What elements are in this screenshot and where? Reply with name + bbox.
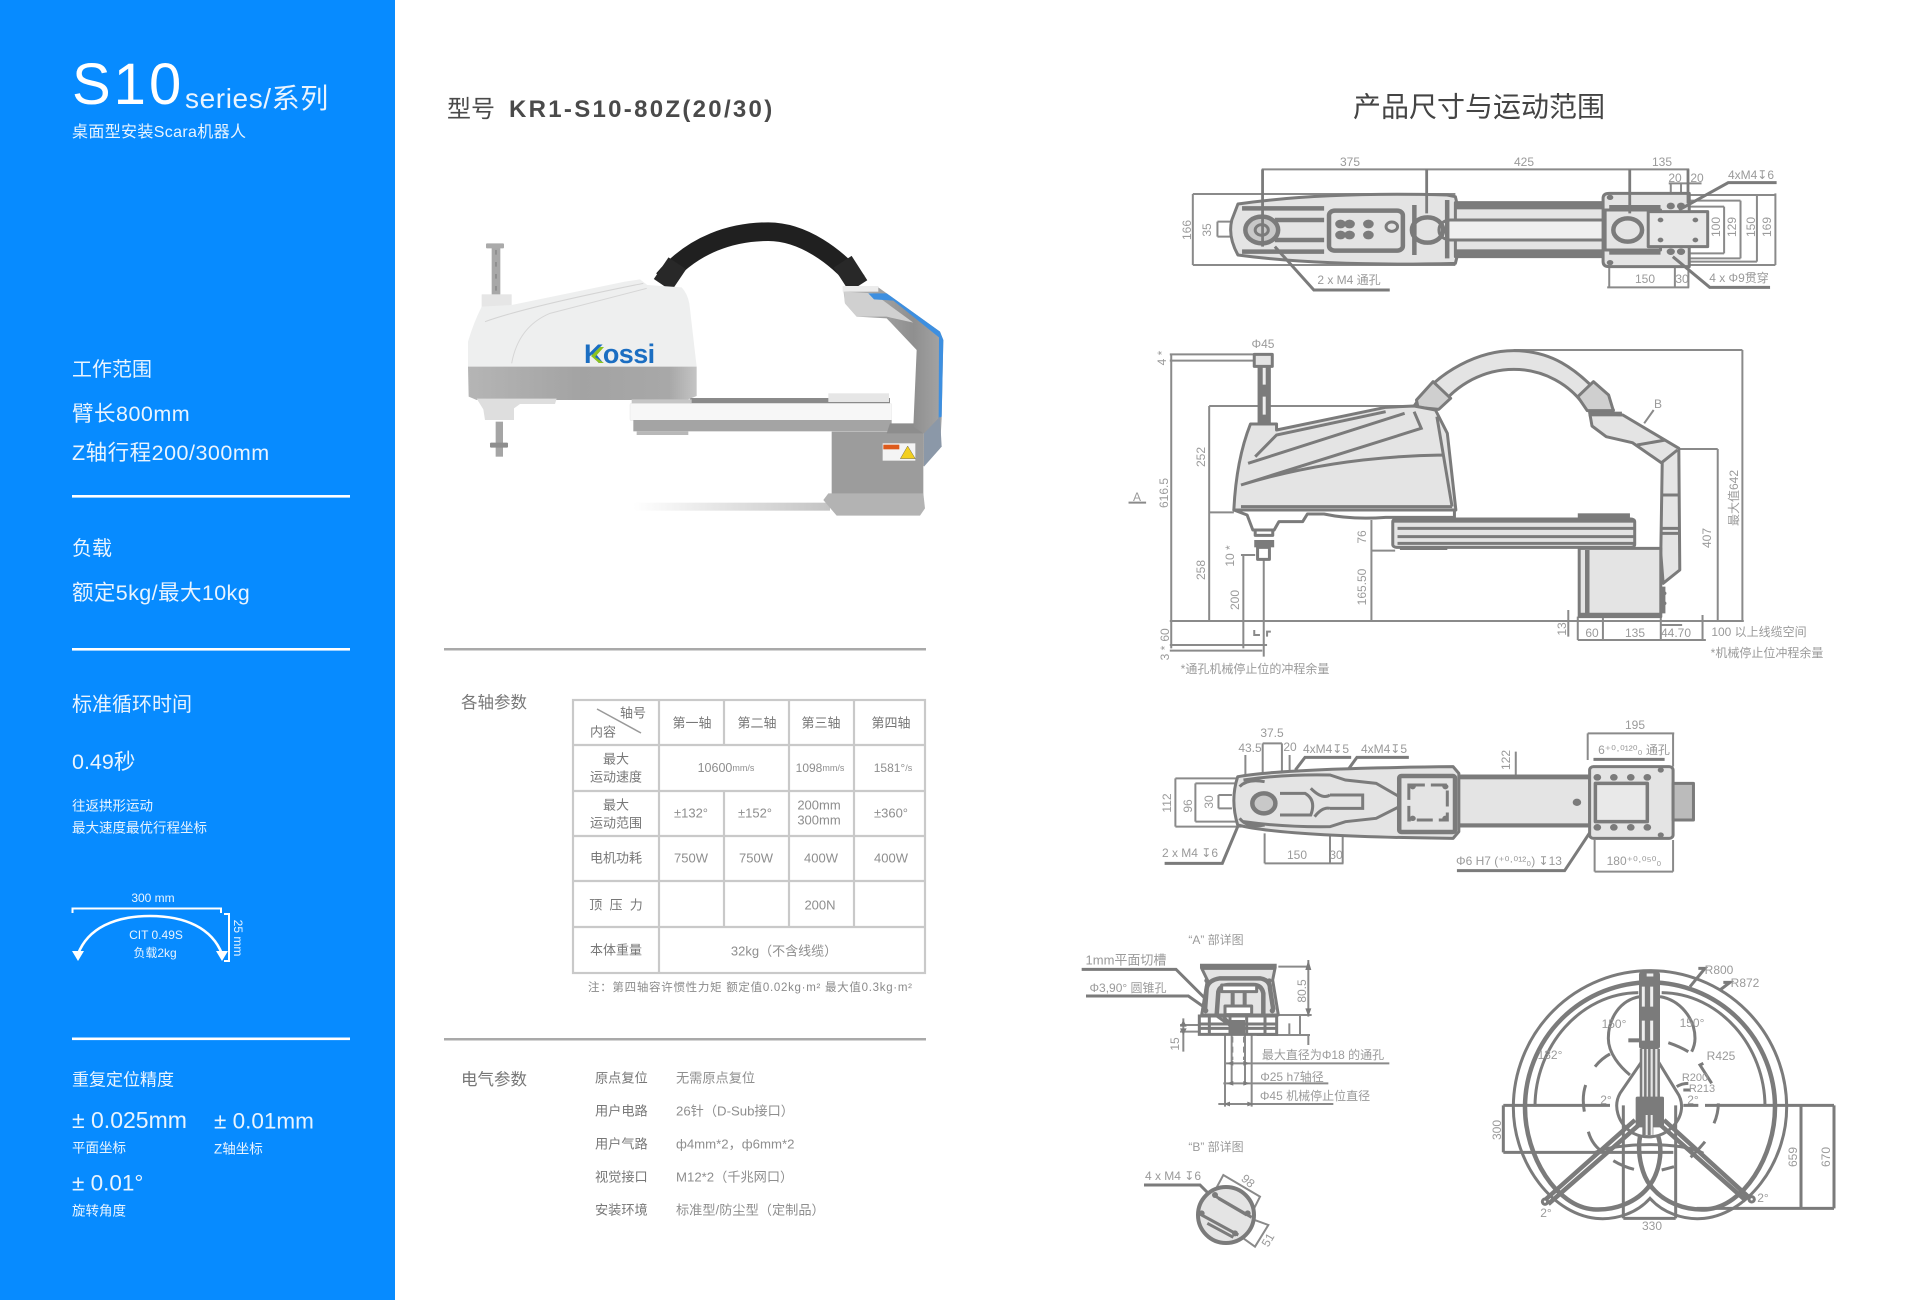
drawing: motion range (1490, 963, 1834, 1233)
drawing: side view: Φ45 (1252, 337, 1275, 351)
list: electrical parameters: 无需原点复位 (676, 1070, 755, 1086)
title: S10 series (72, 52, 329, 117)
table: axis parameters: 300mm (797, 812, 841, 828)
table: axis parameters: 内容 (590, 724, 616, 740)
drawing: motion range: 300 (1490, 1120, 1504, 1140)
table: axis parameters: 最大 (603, 798, 629, 812)
drawing: side view: 最大值642 (1726, 470, 1741, 526)
drawing: top view: 375 (1340, 155, 1360, 169)
drawing: side view: 13 (1555, 622, 1569, 636)
chart: arch motion diagram: CIT 0.49S (129, 928, 183, 942)
heading: dimensions and motion range: 产品尺寸与运动范围 (1353, 92, 1605, 122)
table: axis parameters: 200N (804, 898, 836, 912)
table: axis parameters: 轴号 (620, 706, 646, 720)
title: S10 series: S10 (72, 52, 184, 117)
drawing: side view (1129, 337, 1823, 676)
list: electrical parameters: M12*2（千兆网口） (676, 1170, 793, 1184)
drawing: top view: 169 (1760, 217, 1774, 237)
block: cycle time: 最大速度最优行程坐标 (72, 820, 207, 836)
drawing: side view: A (1133, 490, 1141, 504)
drawing: underside view: 37.5 (1260, 726, 1284, 740)
block: cycle time: 0.49秒 (72, 750, 135, 774)
drawing: motion range: 150° (1602, 1017, 1627, 1031)
drawing: top view: 166 (1180, 220, 1194, 240)
block: working range: Z轴行程200/300mm (72, 441, 270, 465)
heading: model number: KR1-S10-80Z(20/30) (509, 96, 774, 123)
drawing: underside view: 30 (1202, 795, 1216, 809)
list: electrical parameters (595, 1070, 825, 1218)
block: working range: 臂长800mm (72, 402, 190, 426)
drawing: motion range: 132° (1538, 1048, 1563, 1062)
drawing: side view: 616.5 (1157, 478, 1171, 508)
table: axis parameters: 1581°/s (874, 761, 913, 775)
drawing: detail A: 1mm平面切槽 (1086, 952, 1166, 968)
drawing: side view: 76 (1355, 530, 1369, 544)
block: payload (72, 537, 350, 651)
panel: blue sidebar (0, 0, 395, 1300)
table: axis parameters: ±152° (738, 806, 772, 820)
list: electrical parameters: 26针（D-Sub接口） (676, 1102, 794, 1118)
drawing: side view: 3 * (1158, 645, 1172, 660)
drawing: detail B (1144, 1139, 1278, 1249)
drawing: top view: 4 x Φ9贯穿 (1709, 270, 1769, 285)
drawing: top view: 4xM4↧6 (1728, 168, 1774, 182)
drawing: underside view: 20 (1283, 740, 1297, 754)
table: axis parameters: 最大 (603, 752, 629, 766)
drawing: side view: 44.70 (1661, 626, 1691, 640)
table: axis parameters: 750W (674, 850, 709, 866)
drawing: underside view: 96 (1181, 799, 1195, 813)
table: axis parameters: 1098mm/s (796, 761, 845, 775)
drawing: detail B: 98 (1238, 1171, 1258, 1191)
chart: arch motion diagram (72, 891, 245, 961)
table: axis parameters: 本体重量 (590, 942, 642, 958)
list: electrical parameters: 视觉接口 (595, 1168, 648, 1184)
drawing: top view: 129 (1725, 217, 1739, 237)
drawing: detail A: Φ45 机械停止位直径 (1260, 1088, 1370, 1103)
list: electrical parameters: 标准型/防尘型（定制品） (676, 1202, 825, 1218)
drawing: motion range: 2° (1687, 1093, 1699, 1107)
logo: Kossi: Kossi (584, 339, 655, 369)
drawing: motion range: R800 (1705, 963, 1734, 977)
drawing: top view: 2 x M4 通孔 (1317, 273, 1381, 287)
drawing: top view: 35 (1200, 223, 1214, 237)
drawing: top view: 425 (1514, 155, 1534, 169)
block: cycle time: 标准循环时间 (72, 693, 192, 716)
drawing: detail A: 最大直径为Φ18 的通孔 (1262, 1047, 1384, 1062)
table: axis parameters: 顶 压 力 (589, 898, 643, 912)
drawing: top view (1180, 155, 1777, 290)
drawing: top view: 20 (1668, 171, 1682, 185)
drawing: detail A: “A” 部详图 (1188, 932, 1244, 947)
drawing: underside view: 122 (1499, 750, 1513, 770)
block: repeatability: 旋转角度 (72, 1204, 126, 1218)
drawing: side view: 258 (1194, 560, 1208, 580)
drawing: top view: 150 (1635, 272, 1655, 286)
drawing: underside view (1160, 718, 1693, 872)
chart: arch motion diagram: 25 mm (231, 920, 245, 956)
section label: electrical parameters: 电气参数 (461, 1070, 528, 1089)
chart: arch motion diagram: 300 mm (131, 891, 175, 905)
drawing: top view: 150 (1744, 217, 1758, 237)
drawing: underside view: 43.5 (1238, 741, 1262, 755)
drawing: detail A: 80.5 (1295, 979, 1309, 1003)
drawing: motion range: 150° (1680, 1016, 1705, 1030)
drawing: top view: 30 (1675, 272, 1689, 286)
drawing: side view: 252 (1194, 447, 1208, 467)
block: repeatability: Z轴坐标 (214, 1142, 263, 1156)
table: axis parameters: 电机功耗 (590, 850, 642, 866)
table: axis parameters: 运动速度 (590, 770, 642, 784)
block: repeatability: 平面坐标 (72, 1140, 126, 1156)
table: axis parameters (573, 700, 925, 973)
drawing: side view: 4 * (1155, 350, 1169, 365)
drawing: motion range: 2° (1540, 1206, 1552, 1220)
table: axis parameters: ±132° (674, 806, 708, 820)
drawing: underside view: 2 x M4 ↧6 (1162, 846, 1218, 860)
section label: axis parameters: 各轴参数 (461, 693, 528, 712)
drawing: motion range: R213 (1689, 1083, 1715, 1095)
block: repeatability: ± 0.01mm (214, 1108, 314, 1134)
block: working range (72, 358, 350, 498)
list: electrical parameters: 安装环境 (595, 1202, 648, 1218)
drawing: side view: 10 * (1223, 545, 1237, 567)
block: payload: 额定5kg/最大10kg (72, 581, 250, 605)
list: electrical parameters: 用户气路 (595, 1136, 648, 1152)
block: cycle time (72, 693, 207, 836)
drawing: side view: 100 以上线缆空间 (1711, 625, 1807, 639)
drawing: top view: 20 (1690, 171, 1704, 185)
block: repeatability (72, 1038, 350, 1218)
block: cycle time: 往返拱形运动 (72, 798, 153, 814)
drawing: motion range: 670 (1819, 1147, 1833, 1167)
drawing: detail B: “B” 部详图 (1188, 1139, 1244, 1154)
drawing: side view: 200 (1228, 590, 1242, 610)
title: S10 series: series/系列 (185, 83, 329, 114)
table: axis parameters: 200mm (797, 798, 841, 812)
chart: arch motion diagram: 负载2kg (133, 946, 177, 960)
drawing: motion range: R200 (1682, 1072, 1708, 1084)
list: electrical parameters: 用户电路 (595, 1102, 648, 1118)
drawing: detail A: Φ25 h7轴径 (1260, 1069, 1324, 1084)
drawing: underside view: 180⁺⁰·⁰⁵⁰₀ (1607, 854, 1661, 868)
drawing: detail B: 4 x M4 ↧6 (1145, 1169, 1201, 1183)
table: axis parameters: 400W (874, 850, 909, 866)
table: axis parameters: 750W (739, 850, 774, 866)
drawing: underside view: 112 (1160, 793, 1174, 813)
table: axis parameters: 400W (804, 850, 839, 866)
table: axis parameters: 运动范围 (590, 816, 642, 830)
drawing: side view: 165.50 (1355, 568, 1369, 605)
divider: electrical (444, 1038, 926, 1040)
block: repeatability: ± 0.025mm (72, 1107, 187, 1133)
drawing: detail A: 15 (1168, 1037, 1182, 1051)
block: repeatability: 重复定位精度 (72, 1070, 174, 1090)
table: axis parameters: ±360° (874, 806, 908, 820)
drawing: side view: 407 (1700, 528, 1714, 548)
drawing: side view: 60 (1585, 626, 1599, 640)
drawing: underside view: 195 (1625, 718, 1645, 732)
subtitle: 桌面型安装Scara机器人 (72, 123, 246, 141)
table: axis parameters: 第四轴 (871, 716, 911, 730)
block: repeatability: ± 0.01° (72, 1170, 143, 1196)
drawing: motion range: R425 (1707, 1049, 1736, 1063)
table: axis parameters: 第二轴 (737, 716, 777, 730)
drawing: motion range: 659 (1786, 1147, 1800, 1167)
table: axis parameters: 10600mm/s (698, 761, 755, 775)
drawing: top view: 100 (1709, 217, 1723, 237)
list: electrical parameters: 原点复位 (595, 1070, 648, 1086)
drawing: underside view: 4xM4↧5 (1361, 742, 1407, 756)
drawing: detail B: 51 (1259, 1230, 1278, 1249)
drawing: underside view: 4xM4↧5 (1303, 742, 1349, 756)
table: axis parameters: 第一轴 (672, 716, 712, 730)
drawing: side view: 135 (1625, 626, 1645, 640)
drawing: top view: 135 (1652, 155, 1672, 169)
drawing: side view: *通孔机械停止位的冲程余量 (1181, 661, 1329, 676)
drawing: motion range: 2° (1757, 1191, 1769, 1205)
drawing: underside view: 150 (1287, 848, 1307, 862)
drawing: underside view: 6⁺⁰·⁰¹²⁰₀ 通孔 (1598, 743, 1670, 757)
table note: 注：第四轴容许惯性力矩 额定值0.02kg·m² 最大值0.3kg·m² (588, 980, 912, 994)
drawing: motion range: 330 (1642, 1219, 1662, 1233)
drawing: motion range: 2° (1600, 1093, 1612, 1107)
drawing: detail A (1082, 932, 1389, 1107)
drawing: underside view: Φ6 H7 (⁺⁰·⁰¹²₀) ↧13 (1456, 854, 1562, 868)
drawing: detail A: Φ3,90° 圆锥孔 (1089, 981, 1167, 995)
block: payload: 负载 (72, 537, 112, 560)
drawing: side view: 60 (1158, 628, 1172, 642)
drawing: underside view: 30 (1329, 848, 1343, 862)
table: axis parameters: 32kg（不含线缆） (731, 944, 837, 958)
drawing: side view: *机械停止位冲程余量 (1711, 645, 1823, 660)
drawing: motion range: R872 (1731, 976, 1760, 990)
heading: model number: 型号 (447, 96, 495, 123)
divider: parameters (444, 648, 926, 650)
product image: SCARA robot (468, 232, 943, 516)
list: electrical parameters: ф4mm*2，ф6mm*2 (676, 1136, 794, 1152)
table: axis parameters: 第三轴 (801, 716, 841, 730)
drawing: side view: B (1654, 397, 1662, 411)
block: working range: 工作范围 (72, 358, 152, 381)
